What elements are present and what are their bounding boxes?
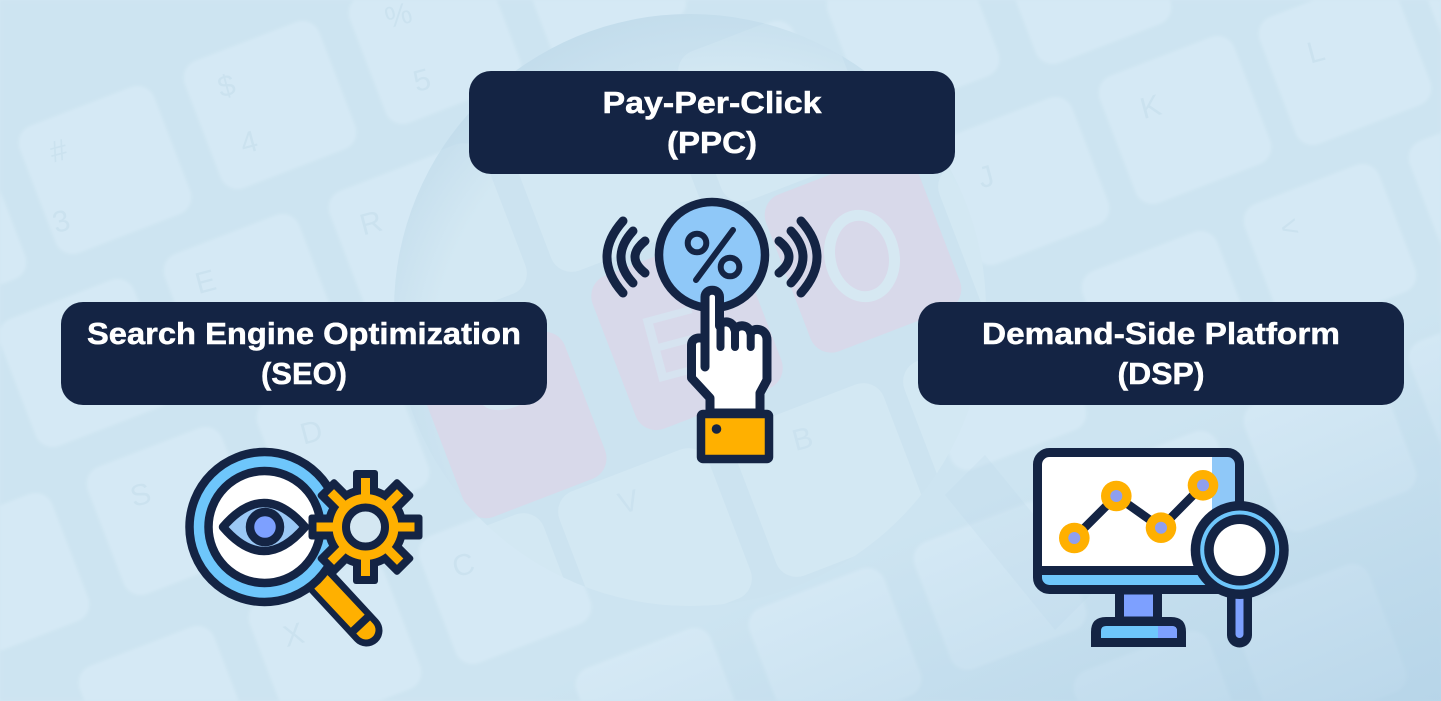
- background: keyboard photo: $: [214, 68, 239, 105]
- background: keyboard photo: R: [356, 205, 386, 242]
- background: keyboard photo: S: [455, 312, 548, 437]
- heading: Search Engine Optimization: Search Engine Optimization: [87, 316, 521, 351]
- icon part: magnifier lens: [190, 452, 340, 602]
- background: keyboard photo: #: [46, 133, 71, 170]
- background: keyboard photo: V: [615, 484, 643, 521]
- icon part: base: [1091, 617, 1186, 647]
- icon part: magnifier: [1191, 501, 1289, 635]
- background: keyboard photo: L: [1304, 34, 1328, 70]
- icon: hand pressing percent button: [607, 202, 817, 459]
- icon part: stand: [1120, 590, 1158, 621]
- icon: monitor with chart and magnifier: [1037, 452, 1289, 647]
- background: keyboard photo: X: [280, 617, 308, 654]
- background: keyboard photo: S: [127, 477, 155, 514]
- icon part: magnifier handle: [318, 578, 369, 633]
- icon part: hand: [692, 290, 767, 413]
- icon part: eye: [223, 503, 305, 551]
- icon part: gear: [308, 470, 422, 584]
- background: keyboard photo: 4: [237, 125, 261, 161]
- icon part: line chart: [1059, 470, 1218, 553]
- heading: Demand-Side Platform: Demand-Side Platform: [982, 316, 1340, 351]
- heading: Pay-Per-Click: Pay-Per-Click: [602, 85, 822, 120]
- panel: Search Engine Optimization (SEO): [61, 302, 547, 405]
- background: keyboard photo: C: [449, 547, 478, 584]
- heading: (PPC): (PPC): [667, 125, 757, 160]
- background: keyboard photo: D: [297, 414, 326, 451]
- icon part: finger lines: [720, 326, 751, 347]
- background: keyboard photo: <: [1277, 210, 1302, 246]
- background: keyboard photo: 3: [49, 204, 74, 240]
- background: keyboard photo: E: [630, 285, 719, 404]
- heading: (DSP): (DSP): [1118, 356, 1204, 391]
- icon part: screen: [1037, 452, 1240, 590]
- background: keyboard photo: E: [192, 264, 220, 301]
- icon part: signal waves: [607, 221, 817, 293]
- background: keyboard photo: J: [975, 159, 998, 195]
- background: keyboard photo: K: [1137, 89, 1165, 126]
- icon part: cuff: [701, 414, 769, 459]
- background: keyboard photo: B: [789, 421, 817, 458]
- icon part: percent button: [659, 202, 765, 308]
- background: keyboard photo: 5: [410, 63, 434, 99]
- panel: Pay-Per-Click (PPC): [469, 71, 955, 174]
- panel: Demand-Side Platform (DSP): [918, 302, 1404, 405]
- icon: magnifier with eye and gear: [190, 452, 422, 633]
- heading: (SEO): (SEO): [261, 356, 347, 391]
